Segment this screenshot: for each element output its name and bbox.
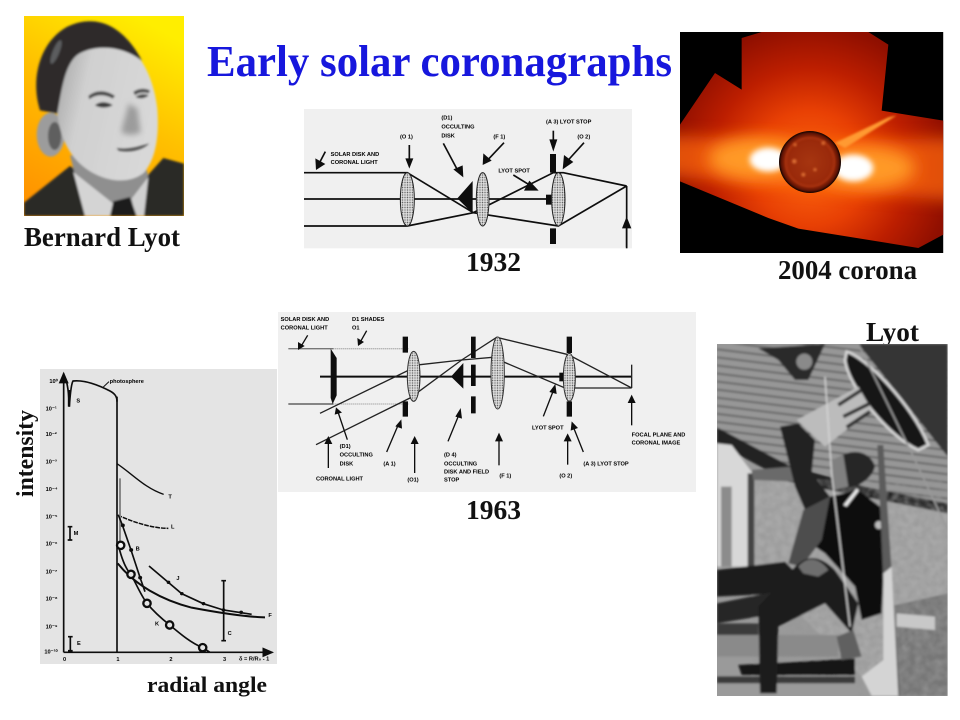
diagram labels: SOLAR DISK AND [331,152,379,158]
diagram labels: (A 3) LYOT STOP [546,120,592,126]
photosphere curve [64,379,144,407]
x axis tick labels: 0 [63,657,66,663]
y axis tick labels: 10⁻⁶ [46,542,58,548]
curve letters: B [136,547,140,553]
curve letters: L [171,524,175,530]
ladder rail [877,445,900,696]
diagram labels: (O 2) [559,473,572,479]
axes [64,373,272,652]
photo: 2004 corona [680,32,944,253]
telescope tube and mirror [858,344,948,457]
diagram labels: O1 [352,325,360,331]
diagram labels: (O 2) [577,134,590,140]
occulting disk D1 [457,181,473,213]
lens O1 [400,173,414,226]
curve letters: F [268,613,272,619]
y axis tick labels: 10⁻⁴ [46,487,58,493]
Lyot stop A3 [567,337,572,417]
curve letters: T [168,494,172,500]
cable [825,377,850,627]
diagram labels: (O 1) [400,135,413,141]
diagram labels: CORONAL LIGHT [331,160,378,166]
grey spike [117,478,123,545]
curve letters [74,399,272,647]
caption: 1932: 1932 [466,247,521,277]
y axis tick labels [44,378,59,656]
curve L [118,515,168,528]
x axis tick labels: 2 [169,657,172,663]
y axis tick labels: 10⁻¹⁰ [44,649,58,656]
diagram labels: STOP [444,477,460,483]
diagram labels: (A 1) [383,461,396,467]
diagram labels: LYOT SPOT [498,169,530,175]
diagram labels: (F 1) [499,473,511,479]
diagram labels: (D1) [340,444,351,450]
door frame [717,443,752,567]
Lyot spot [559,373,563,381]
annotation arrows [315,131,631,247]
Lyot stop [550,154,556,244]
curve T [117,464,164,494]
stone wall [753,480,948,676]
diagram labels: LYOT SPOT [532,425,564,431]
diagram labels: (A 3) LYOT STOP [583,461,629,467]
curve letters: K [155,622,160,628]
aperture A1 [403,337,408,417]
axis label: intensity: intensity [13,410,39,497]
y axis tick labels: 10⁰ [49,378,59,385]
curve letters: J [176,576,179,582]
y axis tick labels: 10⁻⁹ [46,624,58,630]
caption: 2004 corona: 2004 corona [778,255,917,285]
diagram labels: SOLAR DISK AND [281,317,329,323]
diagram: 1932 coronagraph [304,109,632,248]
diagram labels: FOCAL PLANE AND [632,432,685,438]
x axis tick labels: δ = R/R₀ - 1 [239,656,269,662]
caption: Lyot: Lyot [866,317,919,347]
Lyot spot [546,195,551,205]
x axis tick labels: 1 [116,657,119,663]
diagram labels: CORONAL LIGHT [281,325,328,331]
diagram labels: D1 SHADES [352,317,385,323]
curve B data points [123,525,140,578]
diagram labels [281,317,685,483]
x axis tick labels: 3 [223,657,226,663]
y axis tick labels: 10⁻¹ [46,406,57,413]
annotation arrows [298,331,636,473]
photo: Lyot at the telescope [717,344,948,696]
occulting disk D1 [331,349,337,404]
camera optics [797,387,872,447]
diagram labels [331,115,592,175]
curve letters: S [76,399,80,405]
curve letters: M [74,531,79,537]
diagram labels: (D 4) [444,453,457,459]
chart: coronal intensity versus radial angle [40,369,277,664]
y axis tick labels: 10⁻³ [46,458,57,465]
caption: Bernard Lyot: Bernard Lyot [24,222,180,252]
y axis tick labels: 10⁻⁷ [46,569,58,575]
diagram labels: DISK [441,133,456,139]
y axis tick labels: 10⁻⁵ [46,514,58,520]
title: Early solar coronagraphs [207,37,672,86]
diagram labels: CORONAL IMAGE [632,441,680,447]
error bars [68,390,226,651]
lens F1 [491,337,504,409]
diagram labels: (F 1) [493,134,505,140]
diagram labels: CORONAL LIGHT [316,476,364,482]
curve F [118,563,265,617]
occulting disk and field stop D4 [451,363,463,389]
diagram: 1963 coronagraph [278,312,696,492]
diagram labels: OCCULTING [441,124,475,130]
curve B [118,515,145,592]
photosphere curve: photosphere [110,379,144,385]
y axis tick labels: 10⁻² [46,431,57,438]
x axis tick labels [63,656,269,663]
diagram labels: OCCULTING [444,461,478,467]
beam and optical rays [304,173,627,248]
lens O2 [552,173,565,226]
lens O2 [563,353,575,401]
curve J data points [168,582,241,612]
Lyot figure [780,423,830,510]
diagram labels: (O1) [407,477,419,483]
curve letters: C [228,631,232,637]
lens O1 [407,351,420,401]
dome slats [717,344,948,507]
lens F1 [476,173,489,226]
y axis tick labels: 10⁻⁸ [46,597,58,603]
diagram labels: DISK AND FIELD [444,470,489,476]
curve J [149,566,252,614]
caption: 1963: 1963 [466,495,521,525]
curve K with ring markers [117,542,210,652]
axis label: radial angle: radial angle [147,672,267,697]
steps [717,562,793,597]
diagram labels: (D1) [441,115,452,121]
beam and optical rays [288,337,632,445]
curve letters: E [77,641,81,647]
photo: Bernard Lyot portrait [24,16,184,216]
diagram labels: DISK [340,461,354,467]
diagram labels: OCCULTING [340,453,373,459]
